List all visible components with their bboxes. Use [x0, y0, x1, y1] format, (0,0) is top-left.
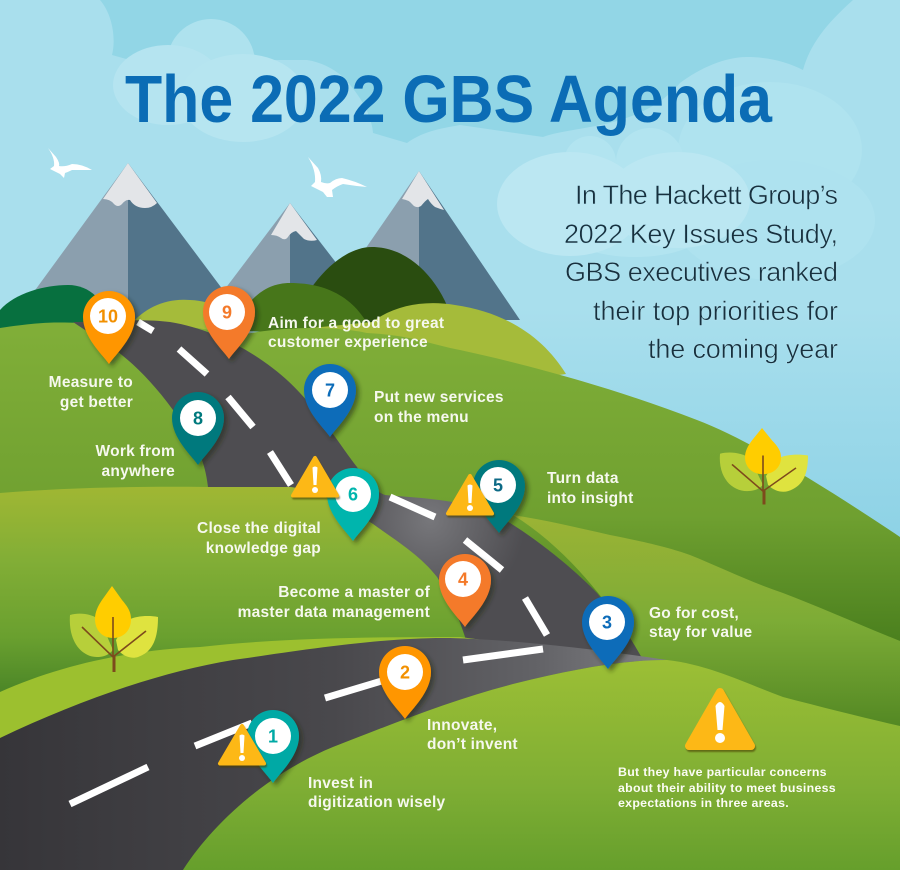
- label 5: into insight: [547, 490, 634, 507]
- cloud: right lobe behind intro: [606, 152, 750, 248]
- hill: olive lobes: [130, 300, 566, 400]
- hill: lower right light band: [513, 515, 900, 760]
- mountain: middle: [194, 203, 388, 330]
- label 8: Work from: [96, 443, 175, 460]
- intro text: their top priorities for: [593, 296, 838, 326]
- pin 6: [327, 468, 379, 541]
- intro text: the coming year: [648, 334, 838, 364]
- pin 10: 10: [98, 306, 118, 326]
- hill: dark forest green: [290, 247, 455, 330]
- pin 3: 3: [602, 612, 612, 632]
- cloud: right of intro text: [675, 160, 875, 280]
- label 7: on the menu: [374, 409, 469, 426]
- label 10: Measure to: [49, 374, 133, 391]
- warning icon: near 1: [220, 726, 264, 764]
- intro text: In The Hackett Group’s: [575, 180, 838, 210]
- label 4: Become a master of: [278, 584, 431, 601]
- label 4: master data management: [238, 604, 430, 621]
- pin 1: [247, 710, 299, 783]
- pin 4: [439, 554, 491, 627]
- concerns note: about their ability to meet business: [618, 781, 836, 795]
- cloud: left lobe behind intro: [497, 152, 643, 256]
- hill: bottom right foreground: [183, 660, 900, 870]
- tree: left: [70, 586, 158, 672]
- hill: left light band: [0, 487, 470, 700]
- intro text: 2022 Key Issues Study,: [564, 219, 838, 249]
- label 2: don’t invent: [427, 736, 518, 753]
- pin 2: 2: [400, 662, 410, 682]
- label 6: knowledge gap: [206, 540, 321, 557]
- intro text: [564, 180, 838, 364]
- hill: mid green: [235, 283, 375, 340]
- label 1: Invest in: [308, 775, 373, 792]
- cloud: title left lobe: [113, 45, 223, 125]
- road: lower section: [0, 638, 667, 870]
- label 5: Turn data: [547, 470, 619, 487]
- mountain: right: [330, 171, 520, 320]
- hill: sliver above road: [0, 637, 560, 760]
- pin 3: [582, 596, 634, 669]
- road dashes: [70, 322, 547, 804]
- hill: main green: [0, 323, 900, 870]
- pin 9: 9: [222, 302, 232, 322]
- label 6: Close the digital: [197, 520, 321, 537]
- label 2: Innovate,: [427, 717, 497, 734]
- tree: right: [720, 428, 808, 504]
- pin 7: 7: [325, 380, 335, 400]
- pin 5: 5: [493, 476, 503, 496]
- pin 10: [83, 291, 135, 364]
- pin 4: 4: [458, 570, 468, 590]
- title: The 2022 GBS Agenda: [125, 62, 773, 137]
- warning icon: large: [689, 692, 751, 746]
- pin 6: 6: [348, 484, 358, 504]
- cloud mass: lighter sky layer: [0, 0, 900, 600]
- pin 8: 8: [193, 408, 203, 428]
- concerns note: expectations in three areas.: [618, 796, 789, 810]
- road: upper section: [73, 320, 642, 658]
- pin 2: [379, 646, 431, 719]
- label 8: anywhere: [101, 463, 175, 480]
- label 10: get better: [60, 394, 133, 411]
- warning icon: near 5: [448, 476, 492, 514]
- pin 7: [304, 364, 356, 437]
- label 3: stay for value: [649, 624, 753, 641]
- label 1: digitization wisely: [308, 794, 446, 811]
- pin 9: [203, 286, 255, 359]
- label 3: Go for cost,: [649, 605, 739, 622]
- warning icon: near 6: [293, 458, 337, 496]
- bird left: [48, 148, 92, 178]
- bird right: [308, 157, 367, 197]
- pin 1: 1: [268, 726, 278, 746]
- hill: dark left: [0, 285, 115, 330]
- pin 5: [473, 460, 525, 533]
- concerns note: But they have particular concerns: [618, 765, 827, 779]
- cloud: upper right lobe: [678, 82, 862, 218]
- label 7: Put new services: [374, 389, 504, 406]
- pin 8: [172, 392, 224, 465]
- cloud: title back bump: [167, 19, 255, 107]
- cloud: title center lobe: [180, 54, 306, 142]
- intro text: GBS executives ranked: [565, 257, 838, 287]
- mountain: left: [6, 163, 253, 330]
- clouds: [113, 19, 875, 280]
- cloud: bumps behind intro: [563, 128, 707, 257]
- label 9: customer experience: [268, 334, 428, 351]
- label 9: Aim for a good to great: [268, 315, 444, 332]
